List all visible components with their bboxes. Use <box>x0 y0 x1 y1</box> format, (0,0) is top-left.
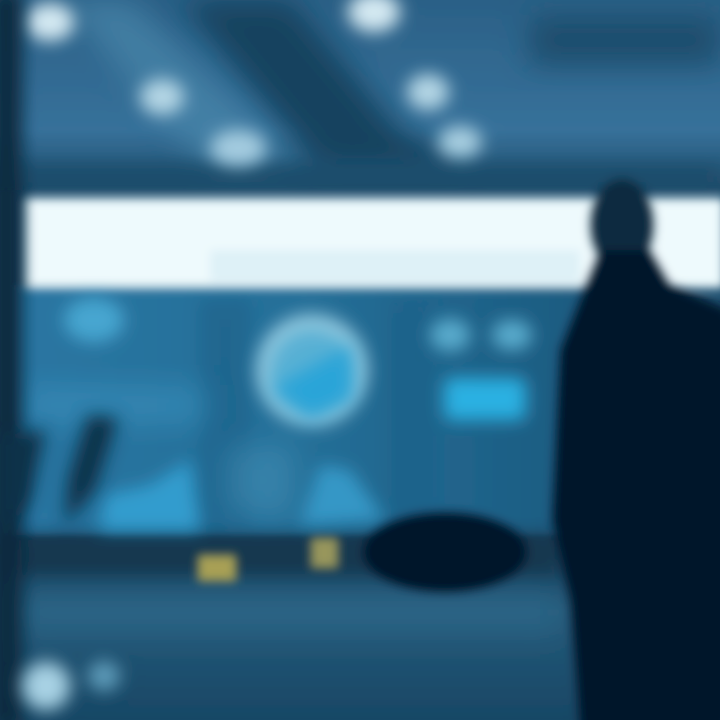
bottom-left chart <box>100 460 200 530</box>
ceiling <box>0 0 720 190</box>
white banner screen <box>24 198 720 288</box>
head <box>590 179 654 271</box>
neck and shoulders <box>552 250 720 720</box>
lower middle chart <box>300 465 385 525</box>
top-left tile <box>64 298 124 342</box>
wall display area <box>15 285 585 545</box>
ceiling lights <box>26 0 482 166</box>
top-right tiles <box>430 319 470 351</box>
chairs silhouettes <box>0 415 118 540</box>
yellow markers <box>198 538 338 581</box>
left pillar <box>0 0 22 720</box>
donut chart <box>256 314 368 426</box>
bottom-left glare <box>22 661 120 710</box>
dark oval table object <box>363 512 527 592</box>
chart panels on display <box>25 298 532 530</box>
person silhouette <box>552 179 720 720</box>
floor <box>0 535 720 720</box>
left mid tile <box>25 385 205 425</box>
right bar block <box>444 378 526 420</box>
